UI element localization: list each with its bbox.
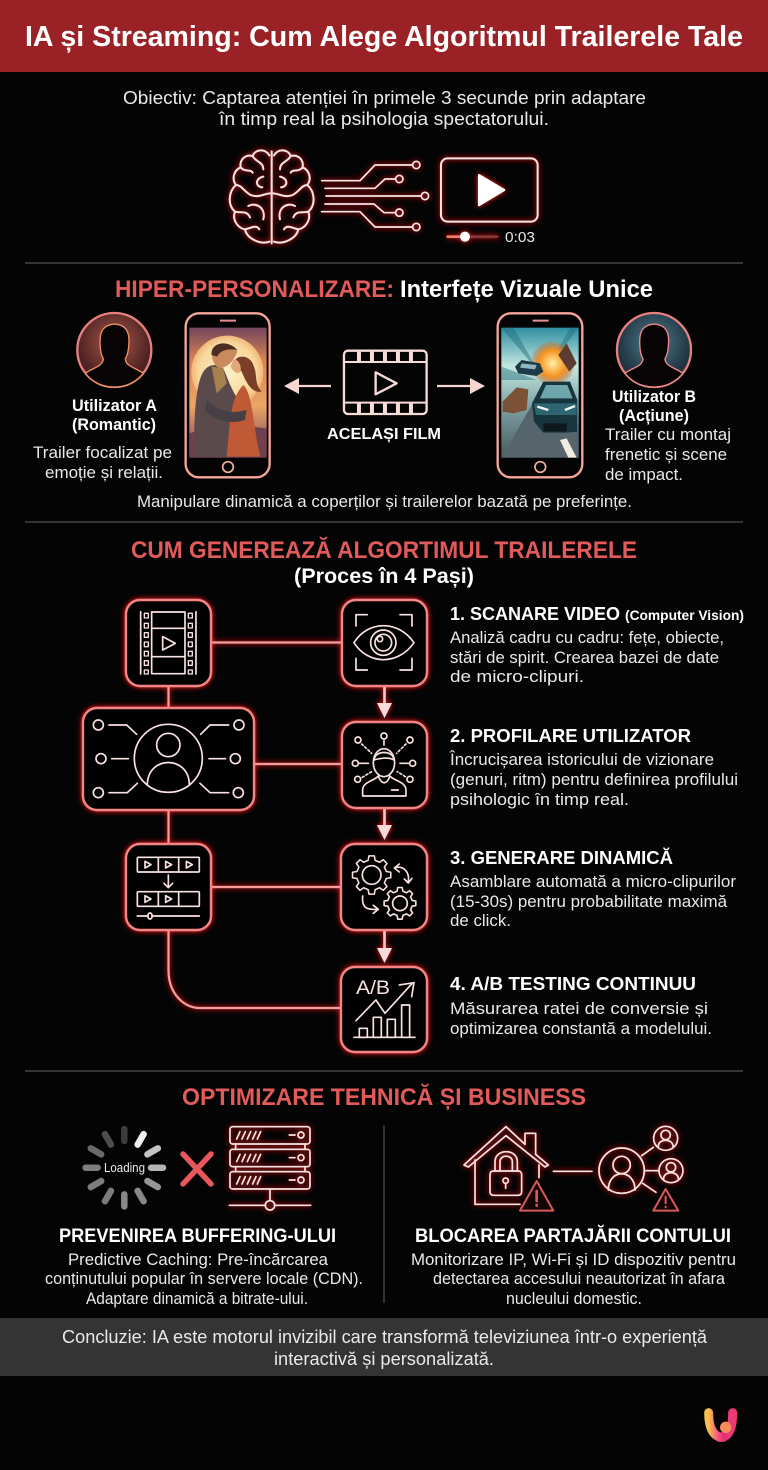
- icon: locked house and users: [464, 1126, 683, 1204]
- illustration: car chase: [501, 328, 579, 458]
- objective text: în timp real la psihologia spectatorului.: [218, 108, 549, 129]
- video time label: 0:03: [505, 230, 535, 246]
- icon: red cross: [183, 1154, 211, 1184]
- text: predictive caching: conținutului popular în servere locale (CDN).: [45, 1270, 363, 1288]
- text: predictive caching: Predictive Caching: Pre-încărcarea: [68, 1251, 329, 1269]
- heading: technical optimization: OPTIMIZARE TEHNICĂ ȘI BUSINESS: [182, 1083, 586, 1111]
- icon: server stack: [229, 1127, 311, 1210]
- step 3 text: [450, 847, 737, 930]
- step 4 text: 4. A/B TESTING CONTINUU: [450, 973, 696, 994]
- icon: brand logo: [709, 1413, 733, 1437]
- panel: user A: [33, 313, 172, 482]
- step 2 text: psihologic în timp real.: [450, 791, 629, 809]
- label: user A name: [72, 397, 157, 434]
- arrow: to phone A: [284, 378, 331, 394]
- subheading: account: BLOCAREA PARTAJĂRII CONTULUI: [415, 1225, 731, 1247]
- text: user B description: [605, 426, 731, 484]
- icon: warning triangles: [520, 1181, 678, 1211]
- box: user data icon: [83, 708, 254, 810]
- text: user B description: frenetic și scene: [605, 446, 727, 464]
- step 3 text: de click.: [450, 912, 511, 930]
- heading: how the algorithm works: (Proces în 4 Pași): [294, 565, 474, 588]
- heading: hyper-personalization: [115, 276, 653, 303]
- box: clips assembly icon: [126, 844, 211, 930]
- step 1 text: 1. SCANARE VIDEO: [450, 603, 620, 624]
- step 1 text: [450, 603, 744, 686]
- panel: user B: [605, 313, 731, 484]
- subheading: buffering: PREVENIREA BUFFERING-ULUI: [59, 1226, 336, 1247]
- step 1 text: de micro-clipuri.: [450, 668, 584, 686]
- step 2 text: [449, 725, 738, 809]
- arrow: to phone B: [437, 378, 485, 394]
- box: profile icon: [342, 722, 427, 808]
- text: monitoring: [411, 1251, 736, 1308]
- heading: how the algorithm works: [131, 536, 637, 588]
- label: A/B on icon: A/B: [356, 978, 390, 999]
- icon: brain: [230, 150, 314, 243]
- title: IA și Streaming: Cum Alege Algoritmul Trailerele Tale: [25, 21, 743, 53]
- phone B with action trailer: [498, 313, 582, 477]
- objective text: [123, 87, 646, 129]
- text: user A description: Trailer focalizat pe: [33, 444, 172, 462]
- objective text: Obiectiv: Captarea atenției în primele 3 secunde prin adaptare: [123, 87, 646, 108]
- conclusion band: interactivă și personalizată.: [274, 1348, 494, 1369]
- box: A/B testing icon: [341, 967, 427, 1052]
- label: loading: Loading: [104, 1161, 145, 1175]
- heading: hyper-personalization: Interfețe Vizuale Unice: [400, 276, 653, 303]
- step 1 text: stări de spirit. Crearea bazei de date: [450, 649, 719, 667]
- text: monitoring: Monitorizare IP, Wi-Fi și ID dispozitiv pentru: [411, 1251, 736, 1269]
- box: gears icon: [341, 844, 427, 930]
- step 1 text: Analiză cadru cu cadru: fețe, obiecte,: [450, 629, 724, 647]
- label: user B name: Utilizator B: [612, 388, 696, 406]
- step 1 text: (Computer Vision): [625, 607, 744, 623]
- hero icon: brain to video: [230, 150, 538, 243]
- icon: user B avatar: [617, 313, 691, 387]
- text: monitoring: nucleului domestic.: [506, 1290, 642, 1308]
- caption: dynamic manipulation: Manipulare dinamică a coperților și trailerelor bazată pe preferințe.: [137, 493, 632, 511]
- heading: hyper-personalization: HIPER-PERSONALIZARE:: [115, 276, 394, 303]
- conclusion band: Concluzie: IA este motorul invizibil care transformă televiziunea într-o experiență: [62, 1326, 708, 1347]
- icon: video player: [441, 158, 538, 242]
- step 2 text: Încrucișarea istoricului de vizionare: [449, 750, 714, 769]
- text: predictive caching: [45, 1251, 363, 1308]
- box: film icon: [126, 600, 211, 686]
- icon: film strip: [344, 351, 427, 414]
- flow diagram: [83, 600, 427, 1052]
- text: user B description: Trailer cu montaj: [605, 426, 731, 444]
- step 2 text: 2. PROFILARE UTILIZATOR: [450, 725, 691, 746]
- panel: buffering prevention: [45, 1127, 363, 1308]
- text: user A description: [33, 444, 172, 482]
- step 4 text: optimizarea constantă a modelului.: [450, 1020, 712, 1038]
- header banner: [0, 0, 768, 72]
- text: user B description: de impact.: [605, 466, 683, 484]
- illustration: romantic couple: [189, 328, 267, 458]
- conclusion band: [0, 1318, 768, 1376]
- label: user A name: Utilizator A: [72, 397, 157, 415]
- label: user B name: (Acțiune): [619, 407, 689, 425]
- connectors: [168, 642, 392, 1008]
- label: user B name: [612, 388, 696, 425]
- panel: account sharing block: [411, 1126, 736, 1308]
- step 3 text: (15-30s) pentru probabilitate maximă: [450, 893, 728, 911]
- phone frame: [186, 313, 270, 477]
- box: eye scan icon: [342, 600, 427, 686]
- step 4 text: Măsurarea ratei de conversie și: [450, 1000, 708, 1018]
- step 3 text: 3. GENERARE DINAMICĂ: [450, 847, 673, 868]
- circuit traces: [322, 161, 429, 231]
- label: user A name: (Romantic): [72, 416, 156, 434]
- phone frame: [498, 313, 582, 477]
- icon: loading spinner: [86, 1129, 163, 1206]
- label: same film: ACELAȘI FILM: [327, 426, 441, 443]
- step 2 text: (genuri, ritm) pentru definirea profilului: [450, 771, 738, 789]
- step 4 text: [450, 973, 712, 1038]
- heading: how the algorithm works: CUM GENEREAZĂ ALGORTIMUL TRAILERELE: [131, 536, 637, 564]
- text: monitoring: detectarea accesului neautorizat în afara: [433, 1270, 726, 1288]
- text: user A description: emoție și relații.: [45, 464, 163, 482]
- phone A with romantic trailer: [186, 313, 270, 477]
- icon: user A avatar: [77, 313, 151, 387]
- text: predictive caching: Adaptare dinamică a bitrate-ului.: [86, 1290, 308, 1308]
- step 3 text: Asamblare automată a micro-clipurilor: [450, 873, 737, 891]
